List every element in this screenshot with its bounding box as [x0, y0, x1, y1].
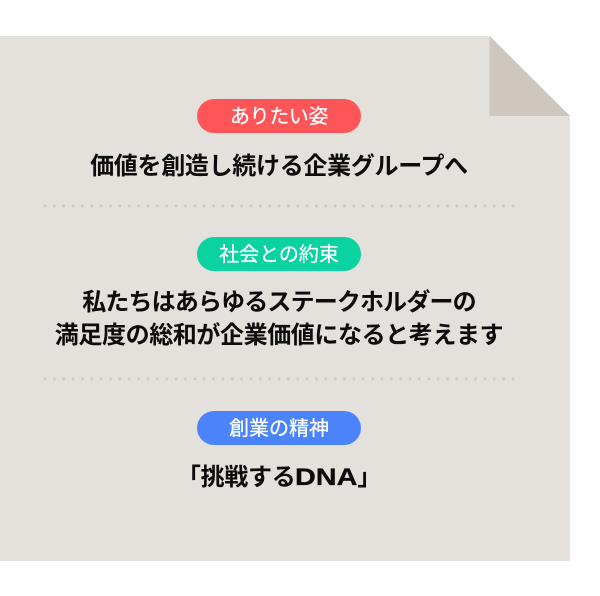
- heading: founding spirit statement: 「挑戦する 」: [177, 464, 381, 491]
- heading: vision statement: 価値を創造し続ける企業グループへ: [90, 153, 468, 180]
- pill: 社会との約束: [197, 237, 361, 271]
- pill: 創業の精神: [197, 411, 361, 445]
- pill: ありたい姿: [197, 99, 361, 133]
- heading: promise statement: [55, 289, 503, 349]
- icon: folded corner: [490, 36, 570, 116]
- heading: promise statement: 私たちはあらゆるステークホルダーの: [82, 289, 476, 316]
- dotted divider: [44, 378, 514, 380]
- pill: ありたい姿: ありたい姿: [230, 106, 328, 128]
- dotted divider: [44, 204, 514, 208]
- pill: 社会との約束: 社会との約束: [219, 244, 339, 266]
- heading: founding spirit statement: DNA: [295, 464, 358, 491]
- heading: promise statement: 満足度の総和が企業価値になると考えます: [55, 322, 503, 349]
- pill: 創業の精神: 創業の精神: [229, 418, 329, 440]
